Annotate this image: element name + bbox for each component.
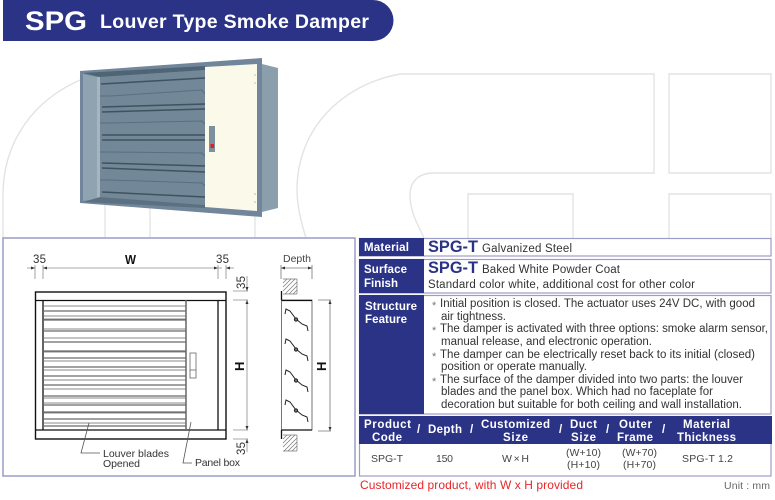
- dimension labels: [33, 252, 248, 455]
- row: structure feature: decoration but suitable for both ceiling and wall installation.: [441, 399, 742, 411]
- row: surface finish: SPG-T: [428, 259, 478, 277]
- illustration: smoke damper 3D view: [80, 58, 278, 217]
- section view drawing: H: [314, 362, 329, 371]
- row: structure feature: manual release, and electronic operation.: [441, 336, 652, 348]
- header banner: SPG: [25, 6, 87, 36]
- dimension labels: 35: [216, 254, 229, 266]
- dimension labels: 35: [236, 276, 248, 289]
- specification table: Depth: [428, 424, 462, 436]
- specification table: /: [470, 424, 474, 436]
- specification table: 150: [436, 453, 453, 465]
- row: structure feature: blades and the panel box. Which had no faceplate for: [441, 386, 713, 398]
- header banner: Louver Type Smoke Damper: [100, 11, 369, 33]
- specification table: (H+10): [567, 459, 600, 471]
- specification table: [359, 416, 772, 476]
- row: structure feature: The surface of the damper divided into two parts: the louver: [440, 374, 743, 386]
- row: structure feature: air tightness.: [441, 311, 506, 323]
- row: material: SPG-T: [428, 238, 478, 256]
- specification table: W × H: [502, 453, 529, 465]
- row: surface finish: Standard color white, additional cost for other color: [428, 279, 695, 291]
- specification table: Thickness: [677, 432, 736, 444]
- dimension lines: [27, 265, 248, 452]
- specification table: Outer: [619, 419, 653, 431]
- specification table: /: [606, 424, 610, 436]
- leader labels: [81, 422, 241, 470]
- specification table: /: [662, 424, 666, 436]
- specification table: Customized: [481, 419, 550, 431]
- row: structure feature: position or operate manually.: [441, 361, 587, 373]
- row: structure feature: Structure: [365, 301, 417, 313]
- row: surface finish: Finish: [364, 278, 398, 290]
- section view drawing: [281, 253, 332, 451]
- front view drawing: [36, 292, 226, 439]
- dimension labels: 35: [33, 254, 46, 266]
- section view drawing: Depth: [283, 253, 311, 265]
- specification table: /: [559, 424, 563, 436]
- specification table: SPG-T: [371, 453, 404, 465]
- specification table: Frame: [617, 432, 653, 444]
- specification table: Product: [364, 419, 411, 431]
- row: material: Material: [364, 242, 409, 254]
- row: structure feature: [359, 295, 771, 414]
- leader labels: Louver blades: [103, 448, 169, 460]
- dimension labels: 35: [236, 442, 248, 455]
- row: structure feature: The damper is activated with three options: smoke alarm sensor,: [440, 323, 768, 335]
- row: structure feature: Feature: [365, 314, 407, 326]
- row: structure feature: The damper can be electrically reset back to its initial (closed): [440, 349, 755, 361]
- specification table: (W+70): [622, 447, 657, 459]
- specification table: Material: [683, 419, 730, 431]
- specification table: (H+70): [623, 459, 656, 471]
- row: structure feature: *: [432, 300, 437, 312]
- leader labels: Panel box: [195, 457, 241, 469]
- specification table: SPG-T 1.2: [682, 453, 733, 465]
- row: surface finish: Baked White Powder Coat: [482, 264, 621, 276]
- dimension labels: W: [125, 252, 137, 267]
- specification table: Size: [503, 432, 528, 444]
- specification table: Duct: [570, 419, 597, 431]
- row: structure feature: *: [432, 351, 437, 363]
- header banner: [3, 0, 393, 41]
- row: surface finish: [359, 259, 771, 293]
- row: structure feature: Initial position is closed. The actuator uses 24V DC, with good: [440, 298, 755, 310]
- row: structure feature: *: [432, 376, 437, 388]
- dimension labels: H: [232, 362, 247, 371]
- panel: dimension drawing: [3, 238, 355, 476]
- row: structure feature: *: [432, 325, 437, 337]
- leader labels: Opened: [103, 458, 140, 470]
- specification table: Size: [571, 432, 596, 444]
- specification table: (W+10): [566, 447, 601, 459]
- row: material: [359, 238, 771, 256]
- note: unit: Unit : mm: [724, 480, 770, 492]
- note: customized product: Customized product, with W x H provided: [360, 478, 583, 492]
- specification table: Code: [372, 432, 402, 444]
- row: material: Galvanized Steel: [482, 243, 572, 255]
- row: surface finish: Surface: [364, 264, 407, 276]
- specification table: /: [417, 424, 421, 436]
